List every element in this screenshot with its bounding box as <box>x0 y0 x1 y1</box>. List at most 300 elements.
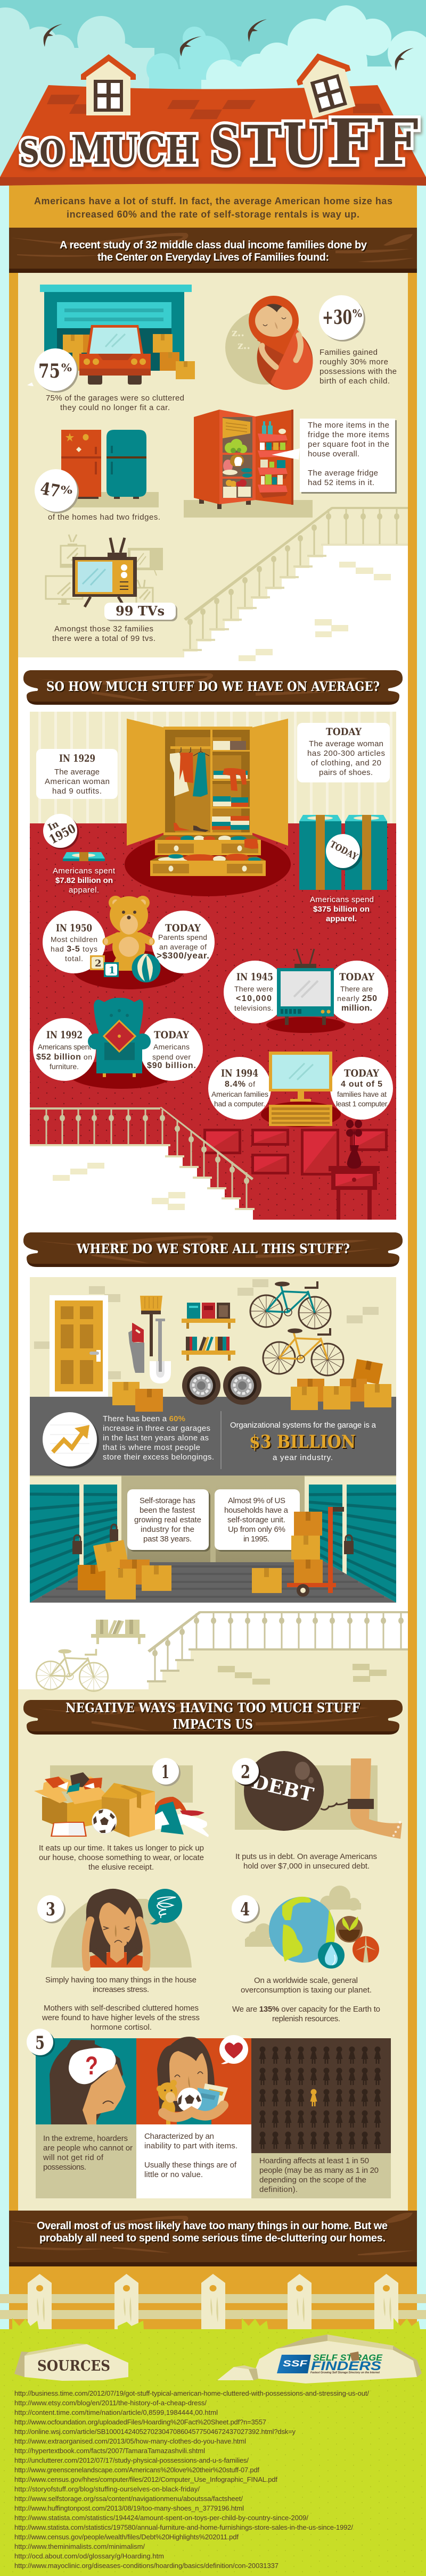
picture frames <box>203 1129 388 1176</box>
icon: windmill <box>353 1933 379 1963</box>
text: possessions: birth of each child. <box>320 377 390 386</box>
callout: today clothing <box>297 723 390 782</box>
stat: +30%: +30 <box>322 306 352 329</box>
fence post 4 <box>288 2274 312 2329</box>
dormer right <box>291 46 361 120</box>
icon: big money stacks: TODAY <box>328 839 359 863</box>
bubble: today toys <box>152 911 215 973</box>
book <box>51 1822 87 1837</box>
group: furniture <box>33 998 203 1089</box>
callout: fastest growing: past 38 years. <box>143 1535 192 1544</box>
title: MUCH <box>71 127 198 173</box>
icon: water drop <box>318 1942 345 1969</box>
callout: in 1929: had 9 outfits. <box>52 787 102 796</box>
icon: two fridges <box>61 430 159 507</box>
icon: orange bike <box>263 1328 343 1375</box>
text: hoarding affects: definition). <box>259 2185 298 2194</box>
callout: fridge: house overall. <box>308 449 359 458</box>
row 4 <box>259 2111 381 2128</box>
stat: 3 billion: $3 BILLION <box>249 1431 356 1453</box>
text: possessions: Families gained <box>320 348 378 357</box>
fence post 5 <box>374 2274 398 2329</box>
label: 99 TVs: 99 TVs <box>116 603 165 619</box>
callout: households: in 1995. <box>243 1535 269 1544</box>
text: 1950 apparel: Americans spent <box>53 866 116 876</box>
sources list: http://online.wsj.com/article/SB10001424052702304708604577504672437027392.html?dsk=y <box>14 2428 296 2436</box>
text: hoarders extreme: will not get rid of <box>43 2153 104 2162</box>
bricks: white wall upper <box>239 562 391 661</box>
callout: in 1929 <box>36 749 118 799</box>
text: hoarders extreme: possessions. <box>43 2163 86 2172</box>
text: hoarders extreme: are people who cannot or <box>43 2144 133 2153</box>
icon: computer <box>269 1052 332 1126</box>
rock: sources: SOURCES <box>37 2358 110 2374</box>
sources list: http://www.huffingtonpost.com/2013/08/19/too-many-shoes_n_3779196.html <box>14 2504 244 2512</box>
bubble: in 1950 toys: had 3-5 toys <box>51 945 97 954</box>
text: item 3: were found to have higher levels of the stress <box>42 2013 200 2022</box>
fence post 2 <box>114 2274 138 2329</box>
group: computers <box>208 1052 393 1127</box>
callout: today clothing: TODAY <box>326 726 362 738</box>
callout: fastest growing <box>127 1489 210 1552</box>
rock: self storage finders logo: SELF ST RAGE <box>313 2353 383 2363</box>
icon: toy blocks: 1 <box>109 965 116 976</box>
badge: 5: 5 <box>35 2032 45 2054</box>
row 3 with highlighted person <box>259 2089 381 2106</box>
bubble: in 1994: had a computer. <box>214 1099 265 1108</box>
text: inability to part: little or no value. <box>144 2170 203 2179</box>
storage doors right <box>309 1485 396 1603</box>
ghost bike <box>36 1649 108 1691</box>
callout: in 1929: The average <box>54 768 100 777</box>
icon: sleeping baby: z.. <box>237 339 250 352</box>
stat: +30% <box>319 295 365 341</box>
boxes: garage <box>112 1359 391 1412</box>
bubble: today computers: families have at <box>337 1090 387 1098</box>
item 2: debt ball and chain: DEBT <box>249 1771 316 1806</box>
text: hoarders extreme <box>36 2124 136 2198</box>
intro text <box>34 196 392 220</box>
text: three car garages: in the last ten years alone as <box>103 1433 209 1443</box>
shelf items <box>174 741 249 832</box>
cloud: back left <box>0 7 161 178</box>
fence post 3 <box>201 2274 225 2329</box>
stat: +30%: % <box>353 307 362 320</box>
bubble: in 1992: furniture. <box>50 1062 79 1071</box>
text: item 2: hold over $7,000 in unsecured debt. <box>243 1862 370 1871</box>
text: 1950 apparel: apparel. <box>69 886 99 895</box>
banner: study intro: A recent study of 32 middle class dual income families done by <box>60 239 367 251</box>
callout: today clothing: has 200-300 articles <box>307 749 385 758</box>
bubble: in 1992 <box>33 1018 96 1081</box>
item 2: debt ball and chain <box>235 1751 402 1839</box>
callout: in 1929: IN 1929 <box>59 753 95 764</box>
badge: 1: 1 <box>161 1762 169 1783</box>
bubble: today toys: TODAY <box>165 922 201 934</box>
group: teddy bear toys <box>43 896 215 989</box>
small teddy <box>157 2080 177 2127</box>
hanging clothes <box>170 747 209 797</box>
title <box>19 105 419 179</box>
icon: big tv with ghost tvs <box>46 535 163 607</box>
badge: in 1950: 1950 <box>47 821 78 847</box>
text: today apparel: apparel. <box>326 914 357 923</box>
title: F <box>375 105 419 179</box>
text: three car garages <box>103 1414 214 1462</box>
text: three car garages: that is where most people <box>103 1443 200 1452</box>
text: inability to part: inability to part with items. <box>144 2141 237 2150</box>
text: item 3: increases stress. <box>93 1985 149 1994</box>
bubble: in 1950 toys: total. <box>65 954 83 963</box>
leg <box>350 1758 402 1839</box>
white stair fill: lower <box>30 1146 253 1220</box>
bubble: in 1994: 8.4% of <box>225 1080 255 1089</box>
title: SO <box>19 132 64 172</box>
row 5 <box>259 2132 381 2149</box>
text: garages: 75% of the garages were so cluttered <box>46 394 184 403</box>
roof <box>0 85 426 186</box>
bubble: in 1992: IN 1992 <box>46 1029 83 1041</box>
callout: fridge: per square foot in the <box>308 440 389 449</box>
text: item 2: It puts us in debt. On average Americans <box>235 1852 377 1861</box>
bubble: in 1994 <box>208 1057 271 1120</box>
bricks: white wall lower <box>53 1163 185 1210</box>
sources list: http://www.greenscenelandscape.com/Americans%20love%20their%20stuff-07.pdf <box>14 2466 259 2474</box>
text: tvs <box>52 624 155 643</box>
text: 1950 apparel <box>53 866 116 895</box>
text: item 3: hormone cortisol. <box>91 2023 152 2032</box>
soccer ball <box>92 1809 117 1833</box>
sources list: http://unclutterer.com/2012/07/17/study-physical-possessions-and-u-s-families/ <box>14 2456 249 2464</box>
bubble: in 1992: $52 billion on <box>36 1053 92 1062</box>
stat: 75%: % <box>61 361 72 374</box>
drawers <box>150 835 266 876</box>
title: T <box>243 114 282 177</box>
row 2 <box>259 2068 381 2085</box>
banner: conclusion <box>9 2211 417 2266</box>
bubble: in 1945: <10,000 <box>236 994 272 1003</box>
sky <box>0 0 426 186</box>
badge: in 1950: In <box>46 819 61 833</box>
badge: 5 <box>27 2029 55 2057</box>
icon: growth arrow <box>43 1412 99 1469</box>
callout: fridge: The average fridge <box>308 469 378 478</box>
bird 1 <box>44 24 62 47</box>
divider <box>220 1411 222 1469</box>
bubble: today toys: >$300/year. <box>157 951 209 961</box>
text: 1950 apparel: $7.82 billion on <box>55 876 113 885</box>
row 1 <box>259 2047 381 2064</box>
callout: fastest growing: Self-storage has <box>140 1496 195 1505</box>
panel: storage units <box>30 1475 396 1603</box>
bubble: today computers: TODAY <box>344 1068 379 1079</box>
text: item 4 <box>232 1976 380 2023</box>
text: today apparel: $375 billion on <box>313 905 370 914</box>
bubble: in 1945 <box>224 961 286 1023</box>
intro text: Americans have a lot of stuff. In fact, the average American home size has <box>34 196 392 206</box>
boxes and hand truck: storage right <box>252 1507 344 1597</box>
title: S <box>210 114 241 177</box>
bubble: today tvs: million. <box>341 1004 372 1013</box>
banner: study intro <box>9 228 417 273</box>
panel: red room <box>30 712 396 1220</box>
lower shelf with books <box>182 1337 235 1361</box>
banner: study intro: the Center on Everyday Lives of Families found: <box>97 252 329 263</box>
storage doors <box>30 1485 117 1603</box>
padlocks <box>72 1524 354 1554</box>
icon: seedling <box>336 1916 363 1943</box>
badge: in 1950 <box>43 813 79 849</box>
text: today apparel: Americans spend <box>310 895 374 904</box>
panel: garage floor <box>30 1397 396 1475</box>
stat: 3 billion <box>230 1421 376 1462</box>
title: U <box>282 111 326 178</box>
icon: wardrobe <box>127 719 288 876</box>
stat: 75%: 75 <box>38 360 60 382</box>
icon: stress bubble <box>148 1889 182 1924</box>
icon: shovel <box>150 1319 171 1383</box>
badge: 3: 3 <box>46 1899 55 1920</box>
fence <box>0 2274 426 2329</box>
side table with vase <box>329 1120 380 1220</box>
text: possessions <box>320 348 397 386</box>
sources list: http://content.time.com/time/nation/article/0,8599,1984444,00.html <box>14 2408 218 2416</box>
stat: 3 billion: a year industry. <box>273 1453 333 1462</box>
text: hoarders extreme: In the extreme, hoarders <box>43 2134 128 2143</box>
bubble: in 1994: American families <box>211 1090 268 1098</box>
text: hoarding affects: depending on the scope of the <box>259 2175 366 2185</box>
text: hoarding affects <box>251 2153 391 2198</box>
heart bubble <box>219 2035 248 2064</box>
icon: toy blocks <box>90 955 119 977</box>
stat: 47%: 47 <box>39 478 62 502</box>
text: item 1: our house, choose something to wear, or locate <box>39 1853 204 1862</box>
cream stair fill: lower section <box>18 1650 408 2213</box>
callout: fridge: The more items in the <box>308 421 389 430</box>
sources list: http://ocd.about.com/od/glossary/g/Hoarding.htm <box>14 2552 164 2560</box>
bricks: cream section <box>218 1664 387 1685</box>
icon: sleeping baby <box>225 296 320 396</box>
icon: small money stack <box>63 852 105 861</box>
stair railing: upper <box>183 507 408 651</box>
sources list <box>14 2389 369 2570</box>
text: item 4: On a worldwide scale, general <box>254 1976 358 1985</box>
heading plank: negative ways: IMPACTS US <box>173 1716 253 1732</box>
icon: saw <box>128 1323 144 1373</box>
text: item 4: replenish resources. <box>272 2014 340 2023</box>
callout: fastest growing: industry for the <box>141 1525 194 1534</box>
wall base <box>9 2266 417 2329</box>
bubble: today furniture <box>140 1018 203 1081</box>
bubble: today furniture: spend over <box>152 1053 191 1061</box>
callout: households: households have a <box>224 1506 289 1515</box>
stat: 47%: % <box>61 483 72 496</box>
badge: 3 <box>37 1895 65 1923</box>
icon: teal bike <box>250 1281 331 1329</box>
icon: sleeping baby: z.. <box>232 326 244 339</box>
bubble: today toys: an average of <box>159 943 207 951</box>
bubble: today furniture: TODAY <box>154 1029 189 1041</box>
callout: households: Almost 9% of US <box>228 1496 285 1505</box>
callout: today clothing: The average woman <box>309 739 383 748</box>
text: tvs: Amongst those 32 families <box>54 624 153 633</box>
badge: 4: 4 <box>240 1899 250 1920</box>
sources list: http://www.statista.com/statistics/194424/amount-spent-on-toys-per-child-by-country-since-2009/ <box>14 2514 308 2522</box>
bird 3 <box>248 19 267 42</box>
bubble: today furniture: Americans <box>153 1043 190 1051</box>
text: today apparel <box>310 895 374 923</box>
sources list: http://storyofstuff.org/blog/stuffing-ourselves-on-black-friday/ <box>14 2485 200 2493</box>
panel: garage <box>30 1277 396 1397</box>
rock: sources <box>14 2344 128 2381</box>
icon: teddy bear <box>104 896 153 971</box>
callout: fridge: fridge the more items <box>308 430 389 439</box>
rock: self storage finders logo: FINDERS <box>311 2359 381 2373</box>
bubble: today toys: Parents spend <box>158 933 207 941</box>
sources list: http://www.mayoclinic.org/diseases-conditions/hoarding/basics/definition/con-20031337 <box>14 2562 278 2570</box>
clutter top <box>43 1772 102 1794</box>
text: item 4: overconsumption is taxing our planet. <box>241 1986 372 1995</box>
bird 4 <box>395 48 414 71</box>
text: item 1: It eats up our time. It takes us longer to pick up <box>39 1844 204 1853</box>
item 1: boxes and clutter <box>34 1765 209 1837</box>
icon: door <box>50 1295 108 1397</box>
panel: hoarders confused: ? <box>85 2052 98 2080</box>
icon: teal tv <box>277 949 334 1025</box>
sources list: http://www.extraorganised.com/2013/05/how-many-clothes-do-you-have.html <box>14 2437 246 2445</box>
heading plank: where do we store: WHERE DO WE STORE ALL THIS STUFF? <box>76 1241 350 1256</box>
bubble: in 1950 toys: IN 1950 <box>56 922 92 934</box>
rock: self storage finders logo: SSF <box>283 2358 308 2369</box>
text: possessions: possessions with the <box>320 367 397 376</box>
group: televisions <box>224 949 388 1033</box>
bubble: in 1945: IN 1945 <box>236 971 273 983</box>
callout: today clothing: pairs of shoes. <box>319 768 373 777</box>
intro text: increased 60% and the rate of self-storage rentals is way up. <box>67 209 359 220</box>
text: item 2 <box>235 1852 377 1871</box>
sources list: http://www.census.gov/people/wealth/files/Debt%20Highlights%202011.pdf <box>14 2533 239 2541</box>
bubble: today furniture: $90 billion. <box>147 1061 196 1070</box>
text: inability to part: Usually these things are of <box>144 2161 237 2170</box>
boxes: storage left <box>78 1540 171 1599</box>
bubble: in 1992: Americans spent <box>38 1043 91 1051</box>
bubble: in 1994: IN 1994 <box>221 1068 258 1079</box>
heading plank: negative ways: NEGATIVE WAYS HAVING TOO MUCH STUFF <box>65 1700 360 1715</box>
callout: households <box>215 1489 300 1552</box>
fence post 1 <box>28 2274 52 2329</box>
sources list: http://www.statista.com/statistics/197580/annual-furniture-and-home-furnishings-store-sales-in-the-us-since-1992/ <box>14 2523 353 2531</box>
label: 99 TVs <box>104 603 177 621</box>
bubble: today tvs: TODAY <box>339 971 374 983</box>
bubble: today tvs: nearly 250 <box>337 994 377 1003</box>
bubble: today computers: 4 out of 5 <box>341 1080 382 1089</box>
bubble: today tvs <box>325 961 388 1023</box>
grass <box>0 2318 426 2576</box>
white stair fill <box>18 546 408 1702</box>
callout: fridge: had 52 items in it. <box>308 478 374 487</box>
heading plank: where do we store <box>23 1232 403 1267</box>
rug under wardrobe <box>125 832 291 896</box>
callout: fridge <box>272 419 397 494</box>
item 4: earth <box>245 1886 379 1969</box>
icon: open fridge <box>184 410 313 518</box>
badge: 2 <box>232 1758 260 1786</box>
text: item 4: We are 135% over capacity for the Earth to <box>232 2005 380 2014</box>
bird 2 <box>180 36 202 56</box>
icon: tires <box>182 1366 261 1405</box>
callout: fastest growing: growing real estate <box>134 1515 201 1524</box>
text: item 1 <box>39 1844 204 1872</box>
bubble: in 1950 toys: Most children <box>51 935 97 944</box>
sources list: http://www.ocfoundation.org/uploadedFiles/Hoarding%20Fact%20Sheet.pdf?n=3557 <box>14 2418 266 2426</box>
badge: 2: 2 <box>241 1762 250 1783</box>
stair railing: red room <box>30 1107 255 1210</box>
text: possessions: roughly 30% more <box>320 357 388 366</box>
bubble: in 1950 toys <box>43 911 105 973</box>
dormer left <box>81 54 136 115</box>
heading plank: negative ways <box>23 1700 403 1735</box>
icon: garage with car <box>40 285 195 385</box>
banner: conclusion: Overall most of us most likely have too many things in our home. But we <box>37 2220 388 2232</box>
icon: broom <box>140 1296 162 1356</box>
sources list: http://www.census.gov/hhes/computer/files/2012/Computer_Use_Infographic_FINAL.pdf <box>14 2475 277 2483</box>
callout: fastest growing: been the fastest <box>140 1506 195 1515</box>
sources list: http://business.time.com/2012/07/19/got-stuff-typical-american-home-cluttered-with-possessions-and-stressing-us-out/ <box>14 2389 369 2397</box>
text: three car garages: There has been a 60% <box>103 1414 185 1423</box>
cloud: middle <box>146 27 274 106</box>
stat: 75% <box>27 348 78 393</box>
stat: 3 billion: Organizational systems for the garage is a <box>230 1421 376 1430</box>
stat: 47% <box>35 469 79 513</box>
sources list: http://www.etsy.com/blog/en/2011/the-history-of-a-cheap-dress/ <box>14 2399 207 2407</box>
text: inability to part <box>136 2124 251 2198</box>
text: hoarding affects: Hoarding affects at least 1 in 50 <box>259 2156 369 2165</box>
bubble: in 1945: There were <box>234 985 273 993</box>
badge: 1 <box>152 1758 181 1786</box>
callout: in 1929: American woman <box>45 777 110 786</box>
house wall <box>9 181 417 2269</box>
bubble: today tvs: There are <box>340 985 373 993</box>
bubble: today computers <box>330 1057 393 1120</box>
ghost shelf <box>91 1620 145 1644</box>
callout: today clothing: of clothing, and 20 <box>311 758 381 768</box>
title: F <box>329 105 373 179</box>
chart: one in fifty people <box>251 2038 391 2153</box>
text: garages <box>46 394 184 412</box>
text: tvs: there were a total of 99 tvs. <box>52 634 155 643</box>
rock: self storage finders logo <box>217 2335 422 2383</box>
sources list: http://www.theminimalists.com/minimalism/ <box>14 2542 145 2550</box>
text: inability to part: Characterized by an <box>144 2132 214 2141</box>
sources list: http://hypertextbook.com/facts/2007/TamaraTamazashvili.shtml <box>14 2447 205 2455</box>
icon: toy blocks: 2 <box>95 958 102 969</box>
text: hoarding affects: people (may be as many as 1 in 20 <box>259 2166 379 2175</box>
text: item 1: the elusive receipt. <box>88 1863 154 1872</box>
item 3: stressed woman <box>51 1889 192 1968</box>
text: item 3: Mothers with self-described cluttered homes <box>44 2004 199 2013</box>
heading plank: how much stuff: SO HOW MUCH STUFF DO WE HAVE ON AVERAGE? <box>46 679 380 694</box>
text: item 3: Simply having too many things in the house <box>45 1975 196 1985</box>
banner: conclusion: probably all need to spend some serious time de-cluttering our homes. <box>39 2232 386 2244</box>
text: item 3 <box>42 1975 200 2032</box>
panel: hoarders attached <box>136 2035 251 2127</box>
soccer ball <box>177 2088 202 2112</box>
cloud: front right <box>201 5 426 186</box>
clothes pile <box>155 1797 209 1837</box>
stair railing: storage <box>147 1611 408 1682</box>
rock: self storage finders logo: Fastest Growing Self Storage Directory on the Internet <box>310 2371 380 2374</box>
icon: armchair <box>88 998 151 1077</box>
